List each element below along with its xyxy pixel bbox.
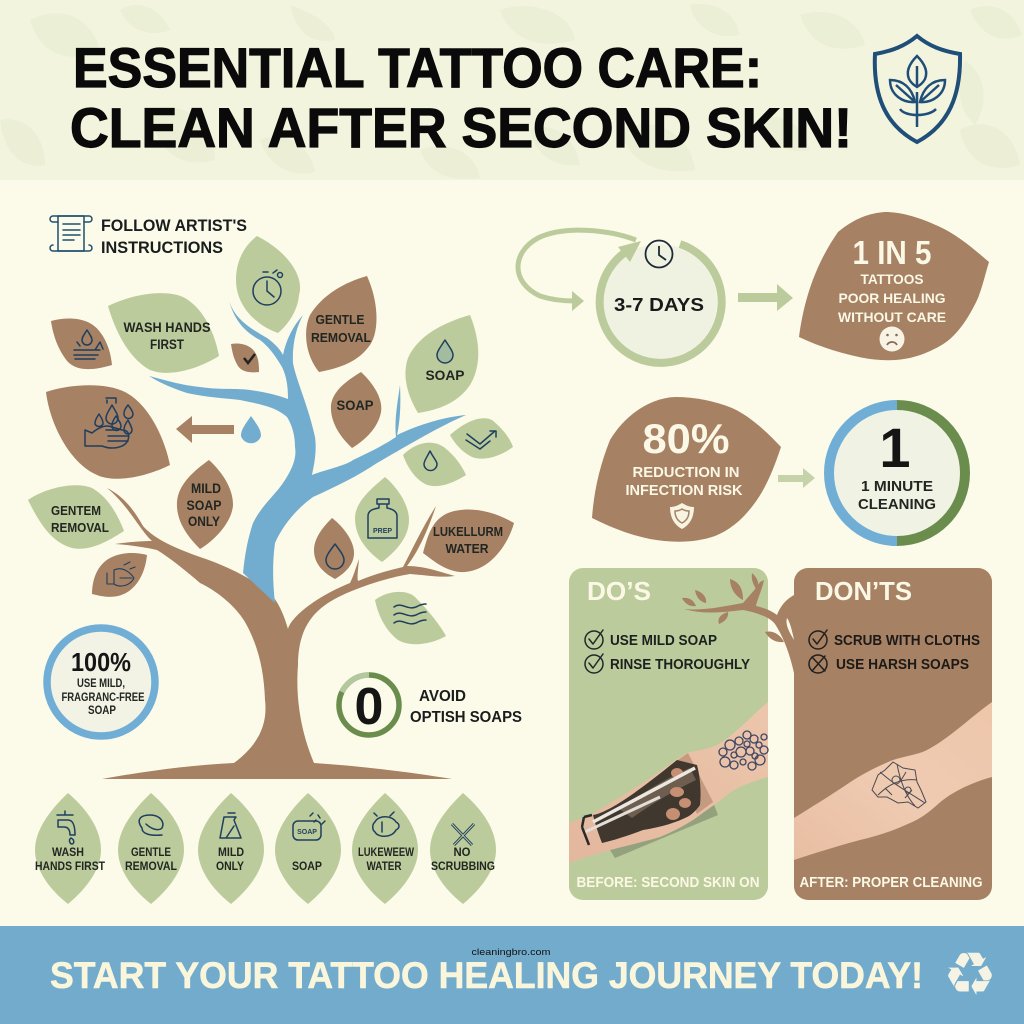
leaf: lukeweew water — [352, 793, 418, 904]
title: ESSENTIAL TATTOO CARE: — [73, 36, 762, 99]
badge: 100% fragrance-free soap: USE MILD, — [77, 678, 125, 690]
check item: rinse thoroughly — [585, 654, 750, 673]
badge: 3-7 days — [600, 240, 722, 363]
text: follow artist's instructions: INSTRUCTIONS — [101, 239, 223, 257]
leaf: 80%: INFECTION RISK — [626, 483, 743, 499]
leaf: gentle removal: REMOVAL — [125, 859, 177, 873]
check item: use mild soap: USE MILD SOAP — [610, 633, 717, 649]
call to action: START YOUR TATTOO HEALING JOURNEY TODAY! — [50, 955, 923, 996]
twig: connecting panels — [682, 573, 794, 673]
leaf: 80%: 80% — [642, 415, 730, 462]
title: CLEAN AFTER SECOND SKIN! — [70, 96, 852, 159]
leaf: gentle removal — [118, 793, 184, 904]
leaf: wash hands first: WASH — [52, 845, 84, 859]
leaf: stopwatch — [236, 236, 300, 333]
icon: water drop — [241, 416, 261, 443]
leaf: soap: SOAP — [292, 859, 322, 873]
leaf: water icon — [51, 319, 112, 369]
badge: zero — [339, 675, 399, 736]
tree: blue branches — [149, 296, 466, 603]
badge: 1 minute cleaning: CLEANING — [858, 496, 936, 513]
leaf: drop brown — [314, 518, 354, 579]
badge: 100% fragrance-free soap: FRAGRANC-FREE — [62, 692, 145, 704]
icon: recycle: ♻ — [943, 940, 997, 1010]
badge: 1 minute cleaning — [829, 405, 965, 541]
leaf: small check — [231, 343, 259, 372]
icon: shield with plant — [875, 36, 960, 142]
leaf: 1 in 5 — [799, 212, 989, 360]
leaf: gentem removal: REMOVAL — [51, 520, 109, 535]
leaf: 1 in 5: 1 IN 5 — [852, 234, 932, 271]
arrow: pointing to hand leaf — [176, 416, 234, 443]
leaf: lukeweew water: LUKEWEEW — [358, 847, 414, 859]
leaf: wash hands first: HANDS FIRST — [35, 859, 106, 873]
leaf: 1 in 5: WITHOUT CARE — [838, 309, 946, 325]
badge: 3-7 days: 3-7 DAYS — [614, 294, 704, 315]
panel: do's: BEFORE: SECOND SKIN ON — [576, 875, 760, 891]
leaf: lukellurm water — [423, 510, 514, 572]
leaf: check arrow — [450, 418, 513, 459]
text: avoid optish soaps: OPTISH SOAPS — [410, 709, 522, 726]
arrow: loop into timer — [518, 230, 636, 311]
badge: 100% fragrance-free soap: SOAP — [88, 705, 116, 717]
icon: shield — [670, 503, 694, 529]
leaf: wash hands first: FIRST — [150, 337, 185, 352]
leaf: mild only: MILD — [218, 845, 244, 859]
check item: rinse thoroughly: RINSE THOROUGHLY — [610, 657, 750, 673]
leaf: soap brown: SOAP — [336, 398, 374, 413]
title — [70, 36, 852, 159]
leaf: 1 in 5: TATTOOS — [860, 271, 924, 287]
leaf: bottle — [355, 477, 409, 562]
leaf: gentle removal: GENTLE — [316, 312, 365, 327]
header band — [0, 0, 1024, 180]
photo: clean forearm — [794, 702, 992, 860]
leaf: soap: SOAP — [297, 829, 317, 836]
leaf: 80% — [592, 397, 781, 542]
arrow: to 1 in 5 — [738, 284, 793, 311]
check item: use mild soap — [585, 630, 717, 649]
badge: 1 minute cleaning: 1 — [879, 416, 911, 479]
panel: don'ts: AFTER: PROPER CLEANING — [800, 875, 982, 891]
leaf: mild soap only: MILD — [191, 481, 221, 496]
leaf: big hand wash — [46, 385, 170, 479]
leaf: no scrubbing: NO — [454, 845, 470, 859]
leaf: soap green: SOAP — [426, 367, 464, 383]
leaf: gentem removal: GENTEM — [51, 503, 101, 518]
leaf: mild only: ONLY — [216, 859, 244, 873]
leaf: gentle removal — [306, 276, 376, 372]
badge: zero: 0 — [355, 678, 383, 736]
leaf: lukellurm water: WATER — [446, 541, 489, 556]
panel: don'ts: DON’TS — [815, 576, 912, 606]
leaf: no scrubbing — [430, 793, 496, 904]
leaf: soap brown — [331, 372, 381, 448]
leaf: gentem removal — [28, 485, 124, 549]
text: avoid optish soaps — [410, 688, 522, 726]
leaf: 1 in 5: POOR HEALING — [838, 290, 946, 306]
leaf: waves — [375, 592, 446, 644]
arrow: to 1 minute — [778, 468, 815, 488]
leaf: mild only — [198, 793, 264, 904]
leaf: small hand icon — [92, 553, 147, 597]
leaf: 80%: REDUCTION IN — [632, 465, 740, 481]
badge: 100% fragrance-free soap — [47, 628, 155, 736]
leaf: wash hands first — [35, 793, 106, 904]
text: avoid optish soaps: AVOID — [419, 688, 466, 705]
badge: 100% fragrance-free soap: 100% — [71, 647, 131, 677]
check item: scrub with cloths: SCRUB WITH CLOTHS — [834, 633, 980, 649]
watermark: cleaningbro.com — [472, 947, 551, 958]
leaf: soap — [275, 793, 341, 904]
leaf: bottle: PREP — [373, 528, 392, 535]
text: follow artist's instructions — [101, 217, 247, 257]
icon: sad face — [880, 326, 904, 352]
leaf: no scrubbing: SCRUBBING — [431, 859, 495, 873]
leaf: soap green — [405, 315, 478, 413]
leaf: mild soap only — [177, 460, 233, 549]
leaf: gentle removal: REMOVAL — [311, 330, 371, 345]
icon: scroll — [50, 216, 92, 251]
leaf: wash hands first — [108, 293, 219, 373]
icon: clock — [646, 240, 672, 268]
panel: do's — [569, 568, 768, 900]
leaf: mild soap only: SOAP — [186, 498, 222, 513]
panel: do's: DO’S — [587, 576, 651, 606]
tree: brown trunk and branches — [102, 488, 455, 779]
footer band — [0, 926, 1024, 1024]
leaf: lukeweew water: WATER — [366, 859, 402, 873]
cross item: use harsh soaps: USE HARSH SOAPS — [836, 657, 969, 673]
photo: forearm with second skin — [569, 702, 768, 863]
leaf: wash hands first: WASH HANDS — [124, 320, 210, 335]
leaf: lukellurm water: LUKELLURM — [433, 524, 503, 539]
leaf: mild soap only: ONLY — [188, 514, 220, 529]
text: follow artist's instructions: FOLLOW ARTIST'S — [101, 217, 247, 235]
badge: 1 minute cleaning: 1 MINUTE — [861, 478, 933, 495]
row: bottom leaves — [35, 793, 496, 904]
leaf: gentle removal: GENTLE — [131, 845, 171, 859]
panel: don'ts — [794, 568, 992, 900]
leaf: small drop — [403, 443, 466, 486]
check item: scrub with cloths — [809, 630, 980, 649]
